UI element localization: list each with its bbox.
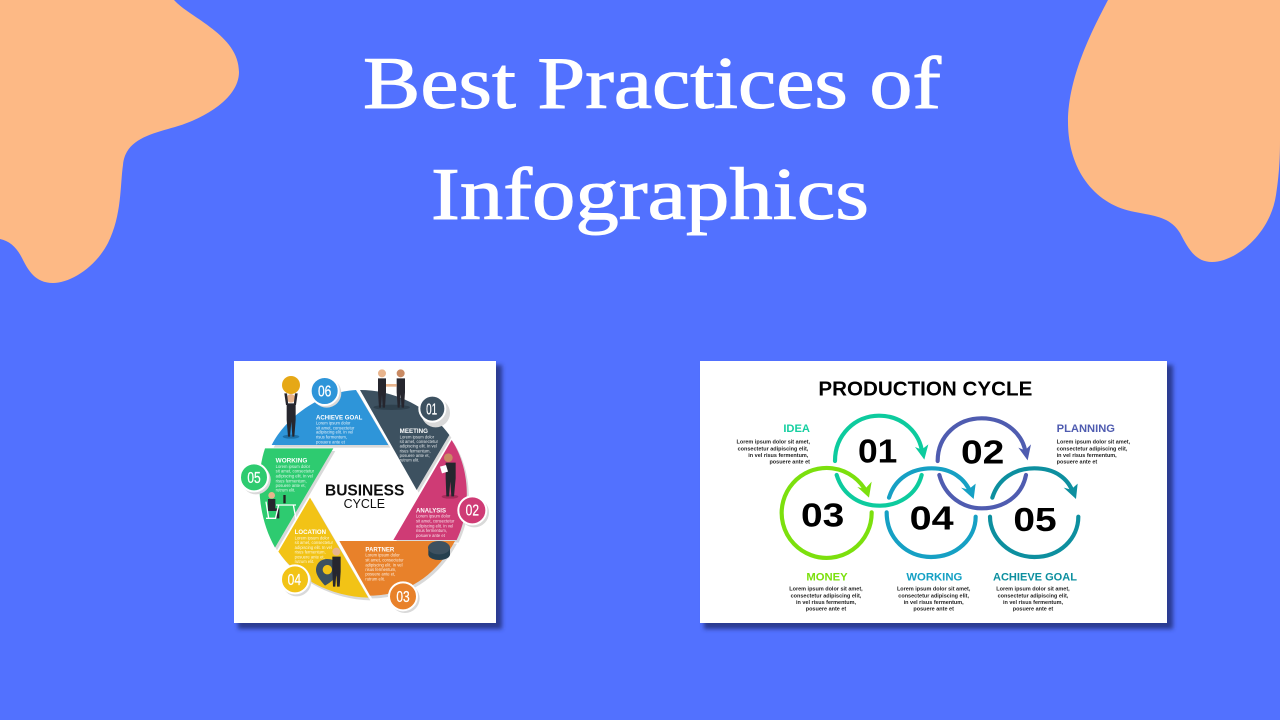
label: idea: in vel risus fermentum, (748, 453, 809, 459)
segment 05: working: risus fermentum, (276, 478, 307, 483)
segment 04: location: sit amet, consectetur (295, 540, 334, 545)
icon: person reading report (440, 453, 458, 499)
label: money: Lorem ipsum dolor sit amet, (789, 587, 863, 593)
center label: business cycle (325, 482, 405, 511)
segment 05: working (259, 448, 333, 548)
label: working (897, 572, 971, 613)
segment 05: working: adipiscing elit. In vel (276, 474, 313, 479)
label: money (789, 572, 863, 613)
center label: business cycle: CYCLE (344, 496, 385, 511)
segment 05: working: Lorem ipsum dolor (276, 464, 311, 469)
segment 01: meeting: rutrum elit. (400, 458, 419, 463)
segment 03: partner: posuere ante et, (365, 572, 395, 577)
segment 05: working: sit amet, consectetur (276, 469, 315, 474)
segment shadows (261, 393, 469, 600)
segment 04: location: Lorem ipsum dolor (295, 535, 330, 540)
ring 04 working (887, 468, 976, 557)
number 01: 01 (858, 433, 897, 470)
ring 01 idea (835, 416, 928, 506)
badge 01: 01 (426, 401, 437, 418)
badge 02 (458, 496, 489, 527)
segment 01: meeting: adipiscing elit. In vel (400, 444, 437, 449)
segment 01: meeting: posuere ante et, (400, 453, 430, 458)
segment 06: achieve goal (272, 390, 388, 445)
badge 03 (389, 582, 420, 613)
icon: map pin with person (316, 548, 341, 587)
title: Infographics (431, 154, 869, 236)
segment 03: partner: rutrum elit. (365, 576, 385, 581)
segment 04: location: posuere ante et, (295, 554, 325, 559)
segment 06: achieve goal: risus fermentum, (316, 434, 347, 439)
label: planning: in vel risus fermentum, (1057, 453, 1117, 459)
segment 06: achieve goal: adipiscing elit. In vel (316, 430, 353, 435)
label: achieve goal: in vel risus fermentum, (1003, 600, 1063, 606)
title: Best Practices of (363, 43, 941, 125)
label: achieve goal: consectetur adipiscing elit, (998, 593, 1069, 599)
badge 05: 05 (247, 470, 261, 487)
icon: person at desk (266, 492, 296, 519)
icon: pie cylinder (428, 541, 450, 560)
badge 02: 02 (466, 503, 479, 520)
badge 03: 03 (396, 589, 410, 606)
segment 05: working: rutrum elit. (276, 488, 295, 493)
label: working: Lorem ipsum dolor sit amet, (897, 587, 971, 593)
segment 03: partner: adipiscing elit. In vel (365, 562, 403, 567)
label: working: in vel risus fermentum, (904, 600, 964, 606)
label: idea: posuere ante et (769, 460, 810, 466)
segment 06: achieve goal: Lorem ipsum dolor (316, 421, 351, 426)
center label: business cycle: BUSINESS (325, 482, 405, 499)
label: achieve goal: ACHIEVE GOAL (993, 572, 1077, 584)
label: working: WORKING (906, 572, 962, 584)
segment 01: meeting: Lorem ipsum dolor (400, 434, 435, 439)
ring 03 money (782, 468, 872, 558)
segment 04: location: risus fermentum, (295, 550, 326, 555)
segment 02: analysis: sit amet, consectetur (416, 519, 455, 524)
segment 02: analysis: adipiscing elit. In vel (416, 523, 453, 528)
number 02: 02 (961, 434, 1004, 471)
label: working: consectetur adipiscing elit, (898, 593, 969, 599)
segment 01: meeting: risus fermentum, (400, 448, 431, 453)
segment 04: location: LOCATION (295, 530, 326, 536)
segment 03: partner: Lorem ipsum dolor (365, 552, 400, 557)
segment 03: partner: PARTNER (365, 547, 395, 553)
badge 01 (419, 396, 450, 427)
icon: two people shaking hands (373, 369, 410, 410)
label: idea: IDEA (783, 423, 810, 435)
decorative blob: top left (0, 0, 239, 283)
label: achieve goal: posuere ante et (1013, 607, 1053, 613)
label: money: in vel risus fermentum, (796, 600, 856, 606)
icon: person holding coin (282, 376, 300, 439)
title (363, 43, 941, 236)
segment 01: meeting: MEETING (400, 429, 428, 435)
label: working: posuere ante et (913, 607, 954, 613)
badge 04: 04 (288, 572, 301, 589)
label: money: MONEY (806, 572, 848, 584)
segment 04: location: adipiscing elit. In vel (295, 545, 332, 550)
segment 03: partner (339, 541, 455, 596)
label: achieve goal: Lorem ipsum dolor sit amet, (996, 587, 1070, 593)
label: planning: posuere ante et (1057, 460, 1097, 466)
decorative blob: top right (1068, 0, 1280, 262)
segment 04: location: rutrum elit. (295, 559, 314, 564)
segment 03: partner: sit amet, consectetur (365, 557, 404, 562)
ring 02 planning (938, 418, 1031, 508)
segment 02: analysis: ANALYSIS (416, 509, 446, 515)
segment 06: achieve goal: sit amet, consectetur (316, 426, 355, 431)
number 04: 04 (910, 501, 954, 538)
label: planning: consectetur adipiscing elit, (1057, 446, 1128, 452)
number 05: 05 (1013, 502, 1057, 539)
ring 05 achieve goal (990, 468, 1078, 557)
badge 05 (240, 463, 271, 494)
label: idea (737, 423, 810, 466)
label: planning (1057, 423, 1131, 466)
label: idea: consectetur adipiscing elit, (738, 446, 809, 452)
segment 05: working: WORKING (276, 459, 308, 465)
panel: production cycle infographic (700, 361, 1173, 629)
heading: production cycle: PRODUCTION CYCLE (818, 379, 1032, 401)
label: money: consectetur adipiscing elit, (791, 593, 862, 599)
label: planning: PLANNING (1057, 423, 1115, 435)
number 03: 03 (801, 497, 844, 534)
badge 06: 06 (318, 384, 331, 401)
badge 06 (311, 377, 341, 408)
segment 01: meeting (360, 390, 449, 490)
segment 02: analysis: Lorem ipsum dolor (416, 514, 451, 519)
segment 04: location (278, 498, 368, 598)
label: money: posuere ante et (806, 607, 846, 613)
segment 01: meeting: sit amet, consectetur (400, 439, 439, 444)
segment 06: achieve goal: posuere ante et (316, 439, 346, 444)
segment 02: analysis (393, 440, 467, 540)
label: achieve goal (993, 572, 1077, 613)
segment 06: achieve goal: ACHIEVE GOAL (316, 416, 363, 422)
segment 03: partner: risus fermentum, (365, 567, 396, 572)
segment 02: analysis: posuere ante et (416, 533, 446, 538)
segment 05: working: posuere ante et, (276, 483, 306, 488)
panel: business cycle infographic (234, 361, 502, 629)
badge 04 (281, 565, 311, 596)
label: idea: Lorem ipsum dolor sit amet, (737, 440, 810, 446)
label: planning: Lorem ipsum dolor sit amet, (1057, 440, 1131, 446)
segment 02: analysis: risus fermentum, (416, 528, 447, 533)
